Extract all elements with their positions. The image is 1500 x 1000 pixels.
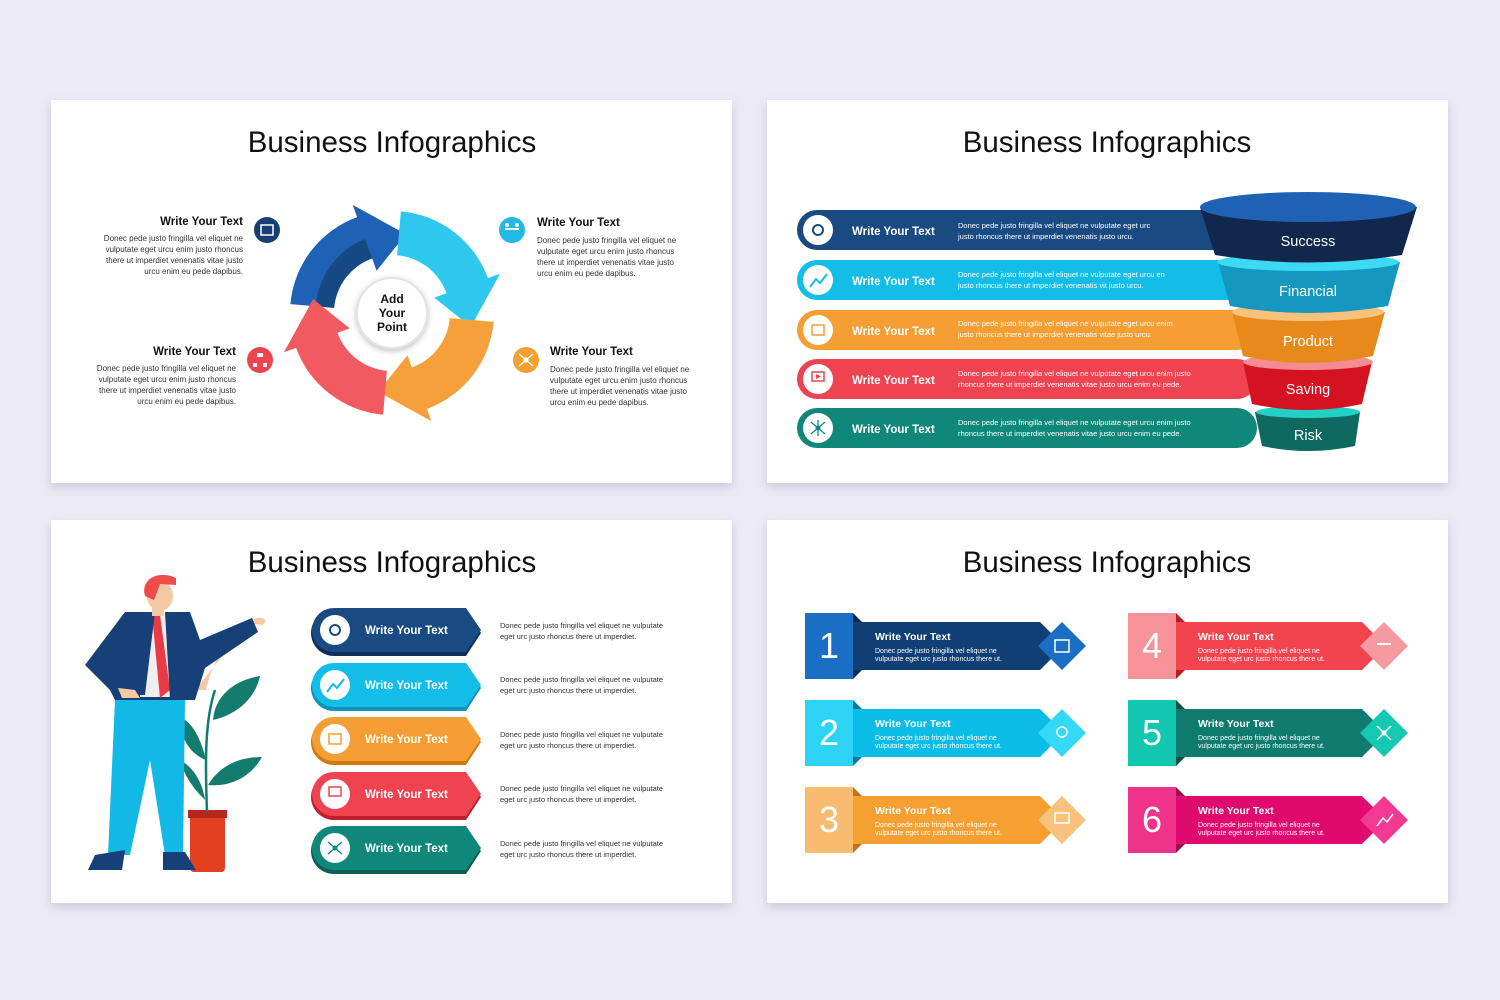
button labels: Write Your Text [365, 680, 448, 692]
bar texts: Write Your Text [852, 375, 935, 387]
descriptions: Donec pede justo fringilla vel eliquet ne vulputate [500, 784, 663, 793]
icon: org chart red [247, 347, 273, 373]
descriptions: eget urc justo rhoncus there ut imperdiet. [500, 632, 636, 641]
bar texts: Write Your Text [852, 424, 935, 436]
option 2: vulputate eget urc justo rhoncus there ut. [875, 743, 1002, 750]
descriptions: Donec pede justo fringilla vel eliquet ne vulputate [500, 730, 663, 739]
option 3: Write Your Text [875, 805, 951, 817]
text block: bottom-left: Write Your Text [153, 346, 236, 358]
descriptions: eget urc justo rhoncus there ut imperdiet. [500, 850, 636, 859]
center circle: Add Your Point: Add [380, 292, 404, 306]
option 1: 1 [819, 625, 839, 666]
text block: bottom-left: vulputate eget urcu enim justo rhoncus [99, 375, 236, 384]
descriptions: Donec pede justo fringilla vel eliquet ne vulputate [500, 675, 663, 684]
option 6 [1128, 787, 1408, 853]
option 3: Donec pede justo fringilla vel eliquet ne [875, 822, 997, 829]
text block: top-right: Donec pede justo fringilla vel eliquet ne [537, 236, 677, 245]
button list [311, 608, 481, 874]
descriptions: eget urc justo rhoncus there ut imperdiet. [500, 741, 636, 750]
text block: bottom-left [97, 346, 237, 406]
text block: top-left: vulputate eget urcu enim justo rhoncus [106, 245, 243, 254]
option 2: 2 [819, 712, 839, 753]
cycle arrows [284, 205, 500, 421]
bar texts: Donec pede justo fringilla vel eliquet ne vulputate eget urc [958, 221, 1150, 230]
funnel [1200, 192, 1417, 451]
center circle: Add Your Point: Your [379, 306, 406, 320]
text block: top-right: vulputate eget urcu enim justo rhoncus [537, 247, 674, 256]
bar texts [852, 221, 1191, 438]
text block: top-left: urcu enim eu pede dapibus. [144, 267, 243, 276]
option 3 [805, 787, 1086, 853]
bar texts: justo rhoncus there ut imperdiet venenatis justo urcu. [957, 232, 1134, 241]
descriptions [500, 621, 663, 859]
text block: bottom-right: urcu enim eu pede dapibus. [550, 398, 649, 407]
bar texts: rhoncus there ut imperdiet venenatis vitae justo urcu enim eu pede. [958, 429, 1181, 438]
descriptions: eget urc justo rhoncus there ut imperdiet. [500, 686, 636, 695]
option 4: Write Your Text [1198, 631, 1274, 643]
title: funnel panel: Business Infographics [963, 126, 1251, 159]
option 4: vulputate eget urc justo rhoncus there ut. [1198, 656, 1325, 663]
title: businessman panel: Business Infographics [248, 546, 536, 579]
text block: top-left: there ut imperdiet venenatis vitae justo [106, 256, 244, 265]
funnel labels: Success [1281, 234, 1335, 250]
option 5: Write Your Text [1198, 718, 1274, 730]
button labels: Write Your Text [365, 843, 448, 855]
text block: top-right: Write Your Text [537, 217, 620, 229]
option 6: vulputate eget urc justo rhoncus there ut. [1198, 830, 1325, 837]
bar texts: Donec pede justo fringilla vel eliquet ne vulputate eget urcu enim justo [958, 418, 1191, 427]
bar texts: Donec pede justo fringilla vel eliquet ne vulputate eget urcu en [958, 270, 1165, 279]
option 4: Donec pede justo fringilla vel eliquet ne [1198, 648, 1320, 655]
option 2: Donec pede justo fringilla vel eliquet ne [875, 735, 997, 742]
descriptions: Donec pede justo fringilla vel eliquet ne vulputate [500, 621, 663, 630]
illustration: businessman and plant [85, 575, 265, 872]
text block: bottom-right: Donec pede justo fringilla vel eliquet ne [550, 365, 690, 374]
text block: bottom-left: urcu enim eu pede dapibus. [137, 397, 236, 406]
button labels: Write Your Text [365, 625, 448, 637]
center circle: Add Your Point: Point [377, 320, 407, 334]
text block: top-right: urcu enim eu pede dapibus. [537, 269, 636, 278]
funnel labels: Financial [1279, 284, 1337, 300]
funnel labels [1279, 234, 1337, 444]
option 5 [1128, 700, 1408, 766]
option 2: Write Your Text [875, 718, 951, 730]
bar texts: Donec pede justo fringilla vel eliquet ne vulputate eget urcu enim justo [958, 369, 1191, 378]
bar texts: justo rhoncus there ut imperdiet venenatis vitae justo urcu. [957, 330, 1152, 339]
text block: bottom-right [550, 346, 690, 407]
title: cycle panel: Business Infographics [248, 126, 536, 159]
bar texts: justo rhoncus there ut imperdiet venenatis vit justo urcu. [957, 281, 1144, 290]
bar texts: Write Your Text [852, 326, 935, 338]
text block: top-left: Write Your Text [160, 216, 243, 228]
option 5: 5 [1142, 712, 1162, 753]
bar texts: Write Your Text [852, 276, 935, 288]
title: numbered panel: Business Infographics [963, 546, 1251, 579]
icon: meeting cyan [499, 217, 525, 243]
center circle: Add Your Point [357, 278, 427, 348]
text block: top-right: there ut imperdiet venenatis vitae justo [537, 258, 675, 267]
option 6: 6 [1142, 799, 1162, 840]
option 1: Write Your Text [875, 631, 951, 643]
option 1: Donec pede justo fringilla vel eliquet ne [875, 648, 997, 655]
bar texts: Donec pede justo fringilla vel eliquet ne vulputate eget urcu enim [958, 319, 1173, 328]
option 6: Write Your Text [1198, 805, 1274, 817]
bar texts: Write Your Text [852, 226, 935, 238]
bars [797, 210, 1257, 448]
icon: calendar navy [254, 217, 280, 243]
text block: top-left [104, 216, 244, 276]
text block: bottom-right: there ut imperdiet venenatis vitae justo [550, 387, 688, 396]
bar texts: rhoncus there ut imperdiet venenatis vitae justo urcu enim eu pede. [958, 380, 1181, 389]
option 6: Donec pede justo fringilla vel eliquet ne [1198, 822, 1320, 829]
button labels: Write Your Text [365, 789, 448, 801]
text block: bottom-left: Donec pede justo fringilla vel eliquet ne [97, 364, 237, 373]
option 4: 4 [1142, 625, 1162, 666]
option 3: 3 [819, 799, 839, 840]
button labels: Write Your Text [365, 734, 448, 746]
option 3: vulputate eget urc justo rhoncus there ut. [875, 830, 1002, 837]
option 5: vulputate eget urc justo rhoncus there ut. [1198, 743, 1325, 750]
descriptions: eget urc justo rhoncus there ut imperdiet. [500, 795, 636, 804]
panel: funnel [767, 100, 1448, 483]
panel: numbered options [767, 520, 1448, 903]
descriptions: Donec pede justo fringilla vel eliquet ne vulputate [500, 839, 663, 848]
option 1 [805, 613, 1086, 679]
icon: network orange [513, 347, 539, 373]
funnel labels: Product [1283, 334, 1333, 350]
funnel labels: Risk [1294, 428, 1323, 444]
option 4 [1128, 613, 1408, 679]
text block: top-right [537, 217, 677, 278]
button labels [365, 625, 448, 855]
funnel labels: Saving [1286, 382, 1330, 398]
option 1: vulputate eget urc justo rhoncus there ut. [875, 656, 1002, 663]
text block: bottom-right: vulputate eget urcu enim justo rhoncus [550, 376, 687, 385]
panel: businessman list [51, 520, 732, 903]
text block: top-left: Donec pede justo fringilla vel eliquet ne [104, 234, 244, 243]
option 2 [805, 700, 1086, 766]
option 5: Donec pede justo fringilla vel eliquet ne [1198, 735, 1320, 742]
text block: bottom-right: Write Your Text [550, 346, 633, 358]
panel: cycle diagram [51, 100, 732, 483]
text block: bottom-left: there ut imperdiet venenatis vitae justo [99, 386, 237, 395]
